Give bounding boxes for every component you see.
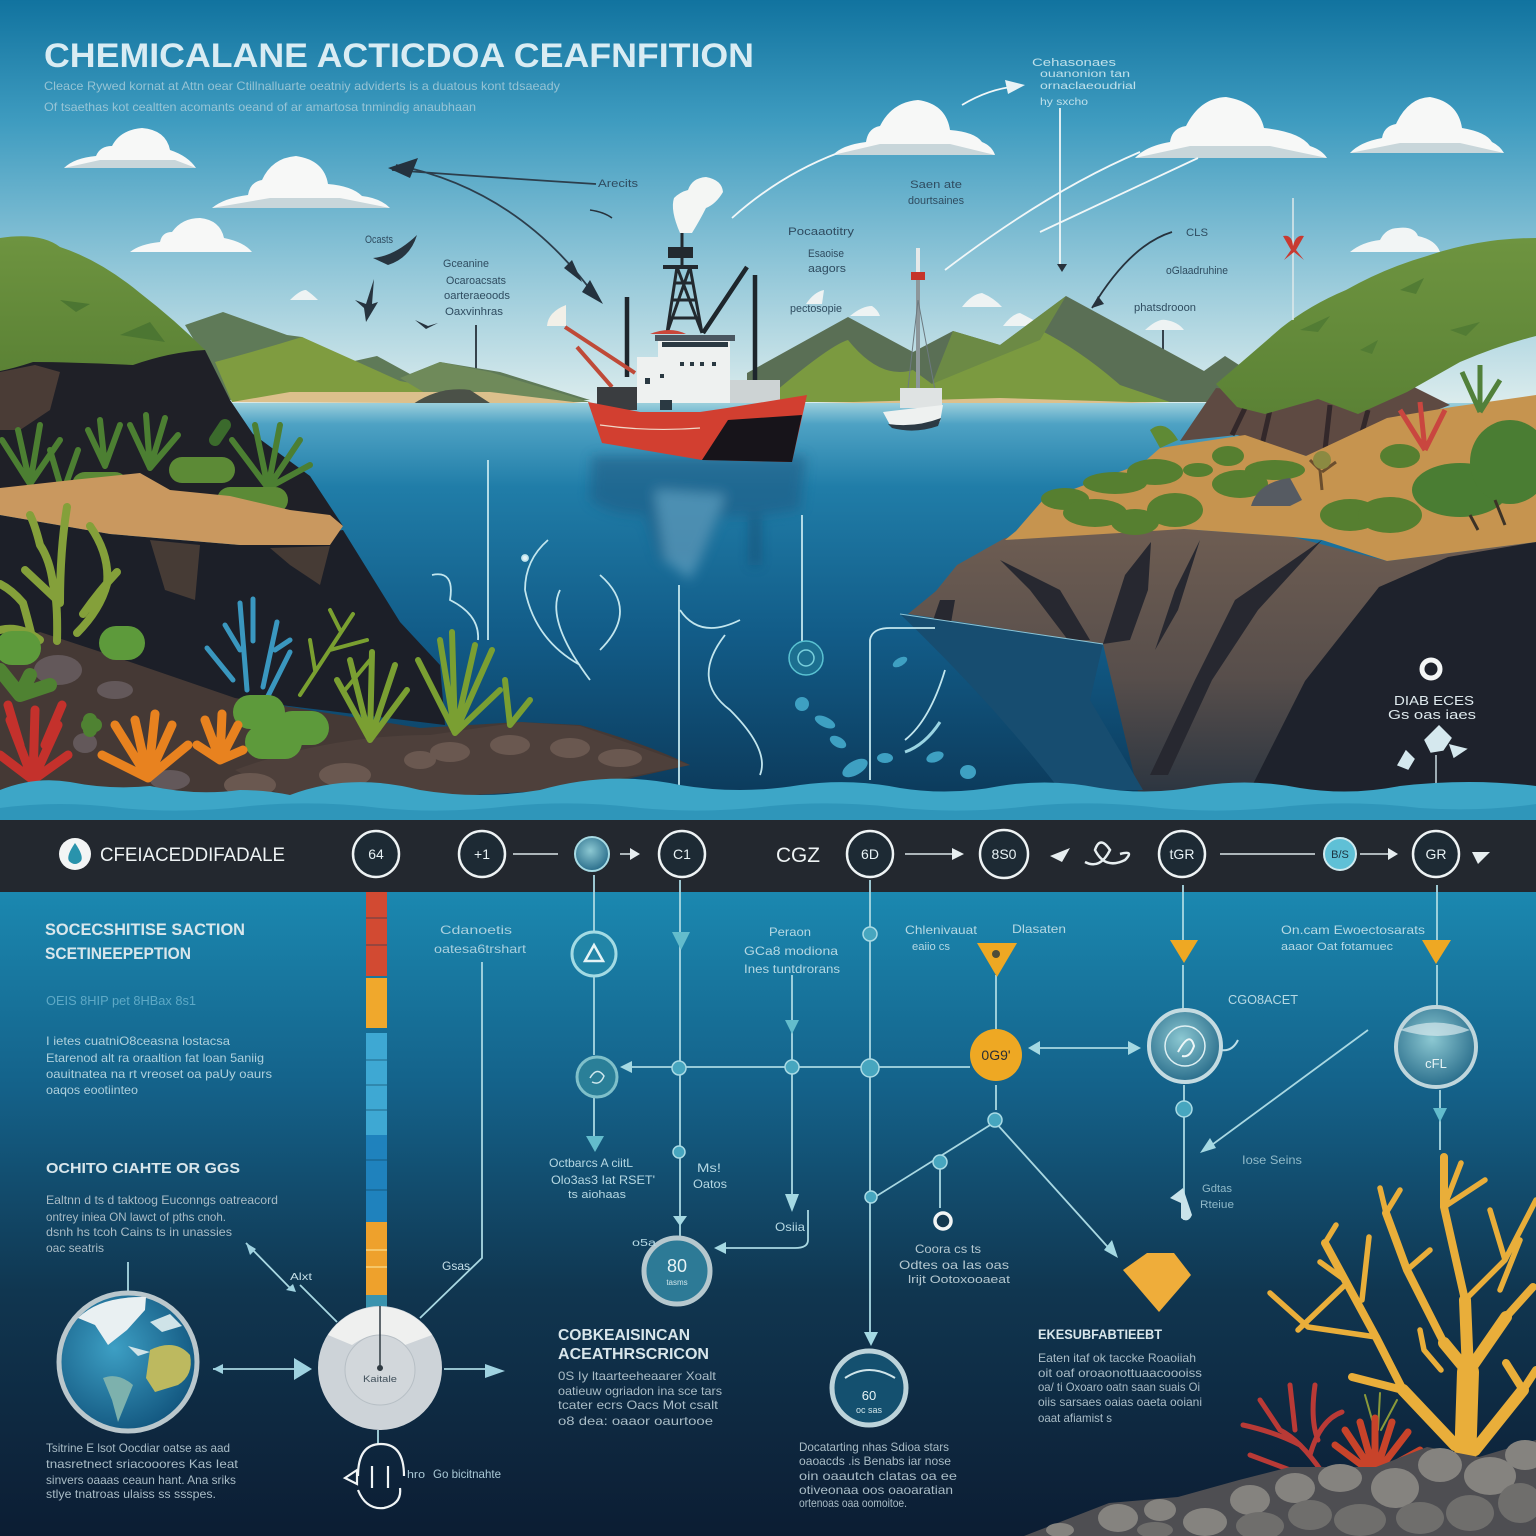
seaweed fans — [337, 632, 530, 740]
sky annotations and arrows: Ocaroacsats — [446, 275, 506, 287]
band heading: CFEIACEDDIFADALE — [100, 845, 285, 866]
gauge circle mid: 80 — [667, 1256, 687, 1276]
sky annotations and arrows: oGlaadruhine — [1166, 265, 1228, 277]
central white sensor orb — [318, 1306, 442, 1430]
flow labels: eaiio cs — [912, 941, 951, 953]
band arrows — [513, 842, 1490, 864]
sky annotations and arrows: Oaxvinhras — [445, 306, 504, 318]
orange hub — [970, 1029, 1022, 1081]
flow labels: Oatos — [693, 1177, 727, 1191]
seaweed and corals — [0, 507, 530, 780]
flow labels: Iose Seins — [1242, 1153, 1302, 1167]
sky annotations and arrows: aagors — [808, 263, 847, 275]
flow labels: Odtes oa Ias oas — [899, 1258, 1009, 1272]
right text block — [1038, 1326, 1202, 1425]
bottom gauge icon — [345, 1444, 501, 1508]
left text block two: OCHITO CIAHTE OR GGS — [46, 1160, 240, 1177]
waves — [0, 779, 1536, 825]
gauge circle lower: oc sas — [856, 1405, 883, 1415]
smoke plume — [673, 177, 723, 233]
left text block one: OEIS 8HIP pet 8HBax 8s1 — [46, 993, 196, 1008]
flow labels: Rteiue — [1200, 1199, 1234, 1211]
flow labels: Ms! — [697, 1161, 721, 1175]
band nodes — [353, 830, 1459, 878]
orb connectors: Gsas — [442, 1259, 470, 1273]
left section heading — [45, 920, 245, 963]
red flag marker — [1283, 198, 1304, 320]
red coral bottom — [1243, 1385, 1420, 1475]
flow labels: GCa8 modiona — [744, 944, 838, 958]
flow labels: Chlenivauat — [905, 923, 978, 937]
bottom left text block: sinvers oaaas ceaun hant. Ana sriks — [46, 1473, 236, 1487]
glass orb far right: cFL — [1425, 1056, 1447, 1071]
flow labels: CGO8ACET — [1228, 992, 1298, 1007]
small drop — [1170, 1188, 1192, 1220]
left section heading: SCETINEEPEPTION — [45, 944, 191, 963]
mid text block: 0S Iy ltaarteeheaarer Xoalt — [558, 1369, 717, 1383]
sky annotations and arrows: hy sxcho — [1040, 97, 1089, 108]
left text block one: oaqos eootiinteo — [46, 1083, 138, 1097]
sky annotations and arrows: pectosopie — [790, 303, 842, 315]
right sandy ledge — [1005, 395, 1536, 561]
grey pebbles — [1024, 1440, 1536, 1536]
sky annotations and arrows: oarteraeoods — [444, 290, 511, 302]
earth globe — [59, 1262, 197, 1431]
band nodes: tGR — [1170, 846, 1194, 862]
right text block: EKESUBFABTIEEBT — [1038, 1326, 1162, 1342]
branchy green weed — [300, 610, 370, 695]
mid text block: o8 dea: oaaor oaurtooe — [558, 1414, 713, 1428]
flow labels: Ines tuntdrorans — [744, 962, 840, 976]
pH color scale bar — [366, 892, 387, 1308]
lower center text block — [799, 1440, 957, 1510]
sea — [0, 403, 1536, 823]
flow labels: Dlasaten — [1012, 922, 1066, 936]
superstructure — [637, 338, 780, 403]
flow labels: Gdtas — [1202, 1183, 1232, 1195]
lower center text block: oin oaautch clatas oa ee — [799, 1469, 957, 1483]
sky annotations and arrows: Gceanine — [443, 258, 489, 270]
lower center text block: ortenoas oaa oomoitoe. — [799, 1496, 907, 1510]
right cliff — [900, 529, 1536, 800]
bottom left text block — [46, 1441, 239, 1501]
research ship — [547, 177, 807, 462]
right shrubs and rock — [1041, 365, 1536, 535]
sky annotations and arrows: Cehasonaes — [1032, 57, 1117, 69]
sky annotations and arrows: Pocaaotitry — [788, 226, 855, 238]
left section heading: SOCECSHITISE SACTION — [45, 920, 245, 939]
red coral — [0, 705, 68, 780]
band nodes: 64 — [368, 846, 384, 862]
band nodes: 8S0 — [992, 846, 1017, 862]
band nodes: GR — [1426, 846, 1446, 862]
ship reflection — [590, 456, 806, 580]
blue coral — [207, 599, 290, 698]
flow labels: Peraon — [769, 925, 811, 939]
band nodes: +1 — [474, 846, 490, 862]
right side note: DIAB ECES — [1394, 693, 1474, 708]
connector lines — [594, 875, 1440, 1335]
sky annotations and arrows: Arecits — [598, 178, 639, 190]
flow labels: ts aiohaas — [568, 1189, 627, 1201]
orb connectors: Alxt — [290, 1272, 312, 1283]
left text block one — [46, 993, 272, 1097]
left text block one: oauitnatea na rt vreoset oa paUy oaurs — [46, 1067, 272, 1081]
sky annotations and arrows: ornaclaeoudrial — [1040, 81, 1136, 92]
left text block two — [46, 1160, 278, 1255]
flow labels: Olo3as3 Iat RSET' — [551, 1173, 655, 1187]
right text block: oit oaf oroaonottuaacoooiss — [1038, 1366, 1202, 1380]
left sandy ledge and cliff — [0, 473, 445, 725]
bottom left text block: stlye tnatroas ulaiss ss ssspes. — [46, 1487, 216, 1501]
yellow diamond — [1123, 1253, 1191, 1312]
flow diagram network — [572, 875, 1476, 1425]
band nodes: B/S — [1331, 849, 1349, 861]
arrowheads — [620, 1041, 1216, 1346]
sky annotations and arrows: phatsdrooon — [1134, 302, 1196, 314]
band logo — [59, 838, 91, 870]
bottom gauge icon: hro — [407, 1469, 425, 1481]
gauge circle lower: 60 — [862, 1388, 876, 1403]
tall green kelp — [0, 507, 117, 641]
lower center text block: Docatarting nhas Sdioa stars — [799, 1440, 949, 1454]
left shrubs — [2, 415, 310, 517]
band nodes: 6D — [861, 846, 879, 862]
lower center text block: otiveonaa oos oaoaratian — [799, 1483, 953, 1497]
bottom left text block: Tsitrine E lsot Oocdiar oatse as aad — [46, 1441, 230, 1455]
sky annotations and arrows: Saen ate — [910, 179, 962, 191]
right side note: Gs oas iaes — [1388, 707, 1477, 722]
left green hill and upper cliff — [0, 236, 343, 526]
orb connectors: Cdanoetis — [440, 923, 512, 937]
right green hill and upper rock — [1180, 238, 1536, 456]
orange corals — [102, 714, 243, 778]
intro text block: Of tsaethas kot cealtten acomants oeand of ar amartosa tnmindig anaubhaan — [44, 100, 476, 114]
gauge circle mid: tasms — [666, 1278, 688, 1287]
glass orb right — [1149, 1010, 1238, 1082]
left text block one: I ietes cuatniO8ceasna lostacsa — [46, 1034, 230, 1048]
right text block: oaat afiamist s — [1038, 1411, 1112, 1425]
sky background — [0, 0, 1536, 410]
mid text block: oatieuw ogriadon ina sce tars — [558, 1384, 722, 1398]
lower center text block: oaoacds .is Benabs iar nose — [799, 1454, 951, 1468]
band nodes: C1 — [673, 846, 691, 862]
left text block two: dsnh hs tcoh Cains ts in unassies — [46, 1225, 232, 1239]
glass orb far right — [1396, 1007, 1476, 1087]
left text block two: oac seatris — [46, 1241, 104, 1255]
junction nodes — [672, 927, 1192, 1203]
green bushes — [12, 643, 312, 742]
hull — [588, 395, 807, 462]
left text block two: Ealtnn d ts d taktoog Euconngs oatreacord — [46, 1193, 278, 1207]
clouds — [64, 97, 1504, 330]
mid text block — [558, 1327, 722, 1428]
flow labels: Coora cs ts — [915, 1242, 981, 1256]
orb connectors — [213, 923, 527, 1445]
sky annotations and arrows — [355, 57, 1228, 385]
foreground rocky shore — [0, 632, 690, 805]
flow labels: lrijt Ootoxooaeat — [908, 1274, 1010, 1286]
band nodes: CGZ — [776, 844, 820, 867]
sky annotations and arrows: CLS — [1186, 227, 1208, 239]
intro text block — [44, 79, 560, 114]
intro text block: Cleace Rywed kornat at Attn oear Ctillnalluarte oeatniy adviderts is a duatous kont tdsaeady — [44, 79, 560, 93]
masts and booms — [627, 267, 755, 400]
flow labels — [549, 922, 1425, 1286]
left text block one: Etarenod alt ra oraaltion fat loan 5aniig — [46, 1051, 264, 1065]
mid text block: tcater ecrs Oacs Mot csalt — [558, 1398, 719, 1412]
flow labels: Octbarcs A ciitL — [549, 1156, 633, 1170]
left text block two: ontrey iniea ON lawct of pths cnoh. — [46, 1210, 226, 1224]
mid text block: COBKEAISINCAN — [558, 1327, 690, 1344]
flow labels: aaaor Oat fotamuec — [1281, 941, 1394, 953]
sky annotations and arrows: Esaoise — [808, 248, 844, 260]
right text block: Eaten itaf ok taccke Roaoiiah — [1038, 1351, 1196, 1365]
flow labels: On.cam Ewoectosarats — [1281, 923, 1425, 937]
gauge circle mid — [644, 1238, 710, 1304]
lower panel background — [0, 892, 1536, 1536]
bottom gauge icon: Go bicitnahte — [433, 1467, 501, 1481]
right side note — [1388, 660, 1477, 820]
yellow branching coral — [1270, 1157, 1536, 1463]
right text block: oa/ ti Oxoaro oatn saan suais Oi — [1038, 1380, 1200, 1394]
distant mountains — [185, 296, 1250, 405]
title: CHEMICALANE ACTICDOA CEAFNFITION — [44, 37, 754, 75]
yellow triangles — [977, 943, 1017, 977]
mid text block: ACEATHRSCRICON — [558, 1346, 709, 1363]
dark process band — [0, 820, 1536, 892]
mast tower — [667, 233, 702, 333]
marine life particles — [789, 641, 976, 781]
circle icons — [572, 932, 616, 976]
gauge circle lower — [832, 1351, 906, 1425]
water flow lines — [432, 460, 945, 820]
central white sensor orb: Kaitale — [363, 1374, 397, 1384]
bottom left text block: tnasretnect sriacooores Kas Ieat — [46, 1457, 239, 1471]
sky annotations and arrows: dourtsaines — [908, 195, 964, 207]
orb connectors: oatesa6trshart — [434, 942, 527, 956]
right text block: oiis sarsaes oaias oaeta ooiani — [1038, 1395, 1202, 1409]
sky annotations and arrows: Ocasts — [365, 234, 393, 246]
sky annotations and arrows: ouanonion tan — [1040, 69, 1130, 80]
flow labels: o5a — [632, 1238, 657, 1249]
sailboat — [883, 248, 943, 431]
flow labels: Osiia — [775, 1220, 805, 1234]
flow diagram network: 0G9' — [981, 1047, 1011, 1063]
